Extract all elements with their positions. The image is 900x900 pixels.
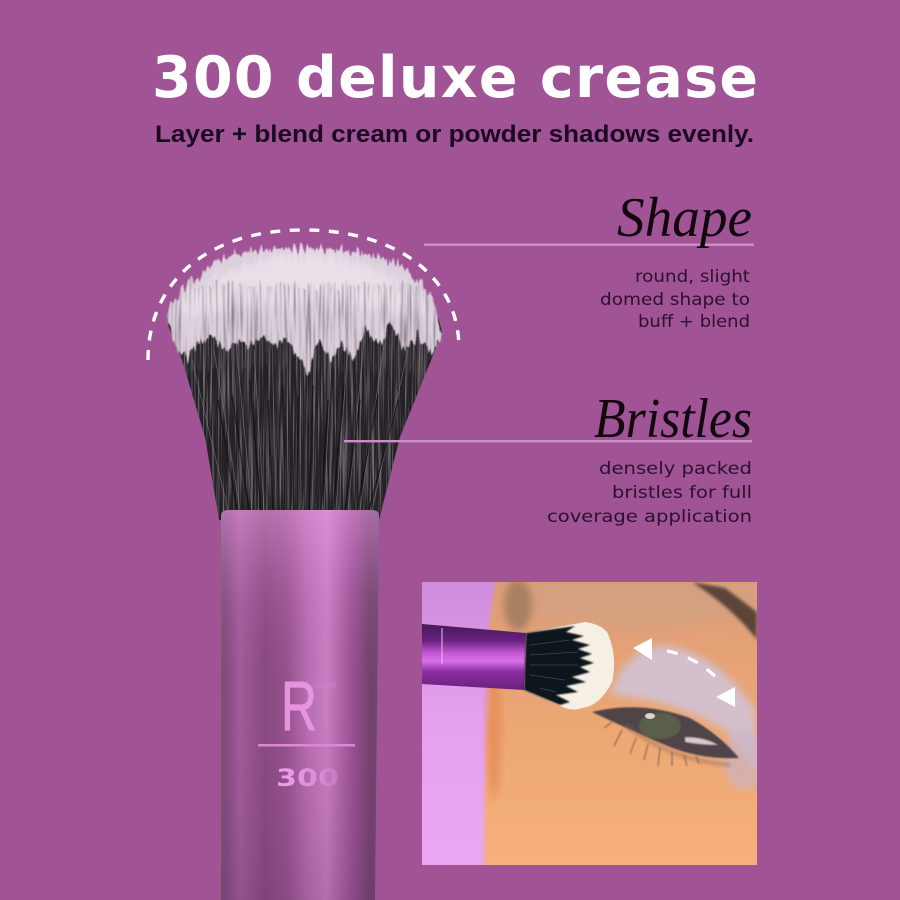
eyebrow <box>692 582 757 640</box>
eye white <box>685 737 718 745</box>
handle logo RT: T <box>315 667 337 745</box>
bristles description: bristles for full <box>612 483 752 503</box>
bristles script heading: Bristles <box>594 388 752 450</box>
mini brush handle <box>422 624 526 690</box>
shape description: domed shape to <box>600 290 750 310</box>
bristles description: densely packed <box>599 459 752 479</box>
iris <box>639 713 681 739</box>
photo: brush on eyelid <box>422 582 757 865</box>
lower lashes <box>604 722 699 766</box>
callout: shape <box>424 187 755 332</box>
dark bristle body <box>167 318 442 520</box>
handle logo RT: R <box>281 667 317 745</box>
handle rule <box>258 744 355 746</box>
dashed dome outline <box>148 230 459 360</box>
eye <box>592 707 739 758</box>
title: 300 deluxe crease <box>152 45 758 111</box>
shape description: round, slight <box>635 267 750 287</box>
bristles description: coverage application <box>547 507 752 527</box>
shape script heading: Shape <box>617 187 752 249</box>
shape leader line <box>424 244 754 246</box>
mini handle marks <box>442 628 443 664</box>
motion arrows <box>633 638 735 707</box>
eyeshadow <box>612 645 757 775</box>
shape description: buff + blend <box>638 312 750 332</box>
brush head bristles <box>166 242 442 520</box>
handle number: 300 <box>276 764 339 792</box>
skin <box>482 582 757 865</box>
white bristle tips <box>166 242 442 376</box>
subtitle: Layer + blend cream or powder shadows evenly. <box>155 121 754 148</box>
mini brush head <box>524 622 614 710</box>
callout: bristles <box>344 388 757 527</box>
bristles leader line <box>344 440 752 442</box>
brush handle <box>221 510 379 900</box>
